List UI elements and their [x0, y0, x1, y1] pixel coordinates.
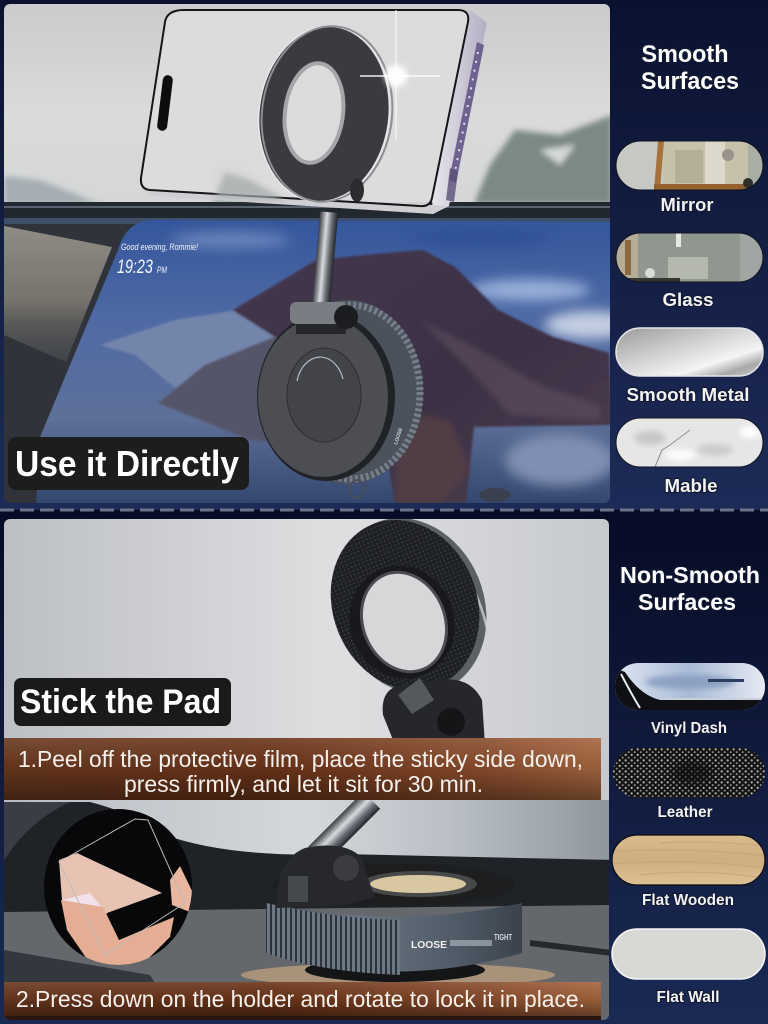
- surface: flat wall: [612, 929, 765, 1006]
- vinyl label: Vinyl Dash: [651, 720, 727, 737]
- background top: [0, 0, 768, 510]
- car screen with landscape: [36, 220, 635, 505]
- banner: step 2: [0, 982, 601, 1016]
- slopes: [101, 310, 275, 388]
- wall label: Flat Wall: [656, 989, 720, 1006]
- hinge: [290, 302, 358, 334]
- large ring holder: [330, 519, 486, 688]
- surface: mirror: [616, 141, 763, 215]
- heading: non-smooth surfaces: Non-Smooth: [620, 562, 760, 588]
- wooden label: Flat Wooden: [642, 892, 734, 909]
- lanyard loop: [350, 480, 364, 498]
- greeting text: Good evening, Rommie!: [121, 242, 198, 253]
- label: use it directly: Use it Directly: [15, 443, 239, 484]
- ring hinge: [382, 678, 484, 738]
- surface: vinyl dash: [612, 663, 768, 737]
- surface: glass: [616, 233, 763, 310]
- panel: stick the pad: [0, 495, 612, 1022]
- heading: non-smooth surfaces: [620, 562, 760, 615]
- panel: use it directly: [4, 4, 635, 505]
- dashboard: [4, 802, 612, 1020]
- clock text: 19:23 PM: [117, 257, 167, 278]
- loose text: LOOSE: [411, 940, 447, 951]
- left dashboard: [4, 224, 140, 503]
- mirror label: Mirror: [660, 194, 714, 215]
- phone: [141, 10, 487, 214]
- loose / tight dial label: LOOSE: [393, 426, 405, 446]
- step 1 text: 1.Peel off the protective film, place the sticky side down,: [18, 746, 583, 772]
- mountain: [233, 250, 612, 503]
- front camera pill: [157, 75, 173, 131]
- blurred mountains behind the windshield: [4, 115, 612, 204]
- angled arm: [308, 800, 380, 848]
- sparkle: [360, 10, 440, 140]
- background bottom: [0, 510, 768, 1024]
- tight text: TIGHT: [494, 933, 512, 942]
- step 2 text: 2.Press down on the holder and rotate to lock it in place.: [16, 986, 585, 1012]
- mount base: [241, 846, 555, 987]
- surface: flat wooden: [612, 835, 765, 909]
- banner: step 1: [0, 738, 601, 800]
- magnetic mount disc: [257, 300, 423, 484]
- heading: smooth surfaces: Surfaces: [641, 68, 739, 95]
- heading: smooth surfaces: Smooth: [642, 41, 728, 68]
- glass label: Glass: [662, 289, 714, 310]
- leather label: Leather: [658, 804, 712, 821]
- label: stick the pad: Stick the Pad: [20, 683, 221, 721]
- inset: peeling the film: [44, 809, 194, 965]
- heading: non-smooth surfaces: Surfaces: [638, 589, 736, 615]
- surface: marble: [616, 418, 763, 496]
- banner: step 1: press firmly, and let it sit for 30 min.: [124, 771, 483, 797]
- mount arm: [312, 211, 338, 308]
- surface: leather: [613, 748, 765, 821]
- heading: smooth surfaces: [641, 41, 739, 95]
- phone magnetic ring: [258, 26, 390, 202]
- metal label: Smooth Metal: [626, 384, 750, 405]
- surface: smooth metal: [616, 328, 763, 405]
- marble label: Mable: [664, 475, 718, 496]
